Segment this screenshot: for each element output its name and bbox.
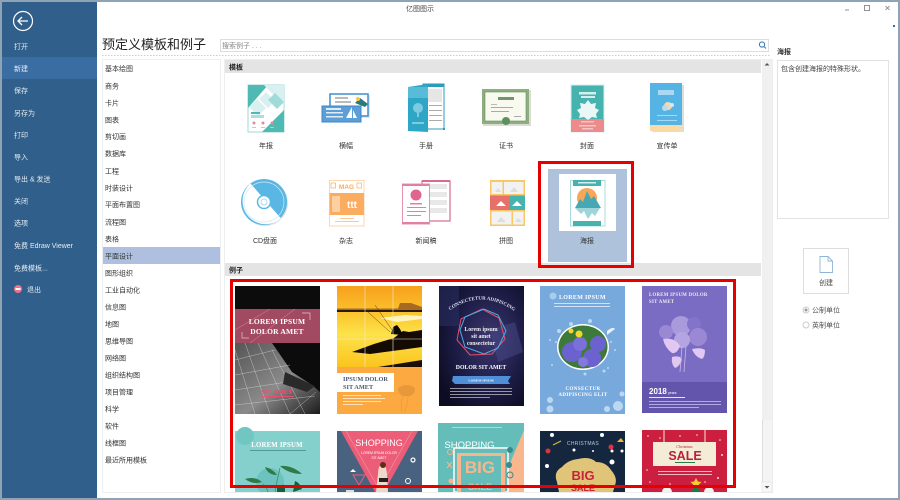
icon: brochure [408, 84, 445, 132]
icon: new document [820, 256, 832, 272]
sidebar menu items: 免费模板... [14, 264, 48, 272]
poster: christmas sale sign: Christmas [676, 444, 693, 449]
category list panel: 地图 [105, 320, 119, 328]
poster: shopping triangle [337, 431, 422, 492]
right panel heading: 海报 [777, 47, 791, 56]
sidebar menu items: 保存 [14, 86, 28, 95]
search box: 搜索例子 . . . [222, 41, 262, 50]
poster: shopping big sale: SALE [468, 482, 492, 492]
label: newsletter: 新闻稿 [416, 236, 436, 245]
section header: templates: 模板 [229, 62, 243, 72]
description box: 包含创建海报的特殊形状。 [781, 64, 865, 73]
category list panel: 时装设计 [105, 184, 133, 192]
label: create: 创建 [819, 278, 833, 287]
example posters gallery [234, 286, 727, 492]
poster: green plant [235, 427, 320, 496]
icon: annual report [248, 85, 284, 132]
content frame [224, 60, 772, 492]
unit radio options: 英制单位 [812, 320, 840, 330]
sidebar menu items: 导出 & 发送 [14, 174, 51, 184]
poster: shopping triangle: LOREM IPSUM DOLOR [361, 451, 397, 455]
category list panel: 线框图 [105, 438, 126, 448]
poster: blue floral: ADIPISCING ELIT [558, 393, 608, 398]
poster: purple hydrangea: LOREM IPSUM DOLOR [649, 293, 708, 298]
poster: shopping big sale: SHOPPING [444, 440, 495, 451]
poster: purple hydrangea [642, 286, 727, 413]
sidebar menu items: 导入 [14, 154, 28, 162]
poster: shopping triangle: SIT AMET [372, 456, 386, 460]
unit radio options [803, 306, 840, 330]
category list panel: 表格 [105, 234, 119, 244]
category list panel: 数据库 [105, 149, 126, 158]
icon: magazine [330, 180, 364, 226]
icon: CD [241, 179, 288, 226]
poster: christmas big sale [540, 431, 625, 493]
icon: newsletter [402, 180, 450, 224]
icon: search [759, 42, 766, 48]
sidebar menu items: 另存为 [14, 108, 35, 118]
heading: 预定义模板和例子 [102, 37, 206, 52]
sidebar menu items: 选项 [14, 218, 28, 228]
poster: blue floral: CONSECTUR [566, 387, 600, 392]
category list panel: 流程图 [105, 218, 126, 226]
poster: geometric badge: DOLOR SIT AMET [456, 365, 506, 371]
label: collage: 拼图 [499, 236, 513, 245]
category list panel: 科学 [105, 404, 119, 414]
sidebar panel [2, 2, 97, 498]
window controls [845, 6, 895, 27]
sidebar menu items: 打开 [14, 42, 28, 51]
icon: flyer [650, 83, 684, 132]
poster: shopping big sale [438, 423, 524, 492]
poster: city architecture: LOREM IPSUM [249, 317, 305, 326]
poster: geometric badge: sit amet [471, 334, 491, 340]
poster: geometric badge: Lorem ipsum [464, 327, 498, 333]
icon: banner [322, 94, 370, 122]
category list panel: 工程 [105, 166, 119, 176]
poster: city architecture [235, 286, 320, 414]
poster: fisherman at sunset: SIT AMET [343, 384, 374, 391]
poster template: selected [548, 169, 627, 262]
poster: shopping triangle: SHOPPING [355, 438, 403, 448]
icon: exit [14, 285, 22, 293]
label: flyer: 宣传单 [656, 141, 678, 150]
search box [220, 40, 768, 52]
icon: cover [571, 85, 604, 132]
icon: certificate [482, 89, 531, 126]
label: poster: 海报 [580, 236, 594, 245]
icon: back arrow [14, 12, 32, 30]
section header: examples: 例子 [229, 266, 243, 274]
poster: blue floral: LOREM IPSUM [559, 295, 606, 301]
category list panel: 软件 [105, 422, 119, 430]
poster: christmas big sale: SALE [571, 483, 595, 493]
poster: geometric badge [439, 286, 524, 406]
section header: templates [225, 60, 761, 73]
scrollbar [762, 60, 772, 492]
poster: geometric badge: consectetur [467, 341, 496, 347]
sidebar menu items: 关闭 [14, 196, 28, 206]
poster: purple hydrangea: 2018 [649, 387, 667, 396]
category list panel [102, 60, 220, 492]
label: magazine: 杂志 [339, 236, 353, 245]
category list panel: 组织结构图 [105, 370, 140, 380]
sidebar menu items [14, 42, 74, 294]
label: banner: 横幅 [339, 141, 353, 150]
poster: christmas sale sign: SALE [668, 449, 702, 463]
category list panel: 图表 [105, 116, 119, 124]
sidebar menu items: 新建 [14, 64, 28, 73]
category list panel: 信息图 [105, 302, 126, 312]
category list panel: 项目管理 [105, 388, 133, 396]
poster: geometric badge: LOREM IPSUM [468, 378, 494, 382]
poster: city architecture: DOLOR AMET [250, 327, 304, 336]
unit radio options: 公制单位 [812, 306, 840, 314]
category list panel: 基本绘图 [105, 64, 133, 73]
label: certificate: 证书 [499, 141, 513, 150]
poster: fisherman at sunset: IPSUM DOLOR [343, 376, 388, 383]
category list panel: 剪切画 [105, 132, 126, 141]
label: annual report: 年报 [259, 141, 273, 150]
poster: city architecture: SIT AMET [261, 389, 293, 396]
category list panel: 工业自动化 [105, 286, 140, 294]
red highlight: example posters [232, 280, 734, 486]
window title: 亿图图示 [406, 4, 434, 13]
poster: christmas sale sign [642, 430, 727, 497]
category list panel: 网络图 [105, 354, 126, 362]
label: cover: 封面 [580, 141, 594, 150]
poster: purple hydrangea: SIT AMET [649, 300, 675, 305]
section header: examples [225, 263, 761, 276]
description box [778, 60, 888, 218]
label: CD cover: CD盘面 [253, 236, 277, 245]
icon: collage [490, 180, 525, 226]
category list panel: 平面布置图 [105, 200, 140, 209]
icon: magazine: MAG [339, 184, 354, 191]
poster: blue floral [540, 286, 625, 414]
poster: christmas big sale: CHRISTMAS [567, 441, 599, 447]
category list panel: 卡片 [105, 98, 119, 108]
category list panel: 平面设计 [105, 252, 133, 260]
create button [804, 248, 848, 294]
poster: geometric badge: CONSECTETUR ADIPISCING ELIT [448, 296, 516, 311]
sidebar menu items: 退出 [27, 285, 41, 294]
red highlight: selected poster template [540, 162, 632, 266]
sidebar menu items: 打印 [14, 130, 28, 140]
category list panel: 图形组织 [105, 268, 133, 278]
poster: green plant: LOREM IPSUM [251, 442, 303, 449]
sidebar menu items: 免费 Edraw Viewer [14, 241, 74, 250]
poster: purple hydrangea: years [668, 391, 677, 395]
icon: poster [570, 180, 605, 226]
poster: shopping big sale: BIG [465, 458, 495, 477]
poster: fisherman at sunset [337, 286, 422, 414]
category list panel: 商务 [105, 82, 119, 90]
poster: christmas big sale: BIG [571, 468, 595, 483]
category list panel: 最近所用模板 [105, 456, 147, 464]
label: brochure: 手册 [419, 141, 433, 150]
icon: magazine: ttt [347, 200, 358, 211]
category list panel: 思维导图 [105, 336, 133, 346]
